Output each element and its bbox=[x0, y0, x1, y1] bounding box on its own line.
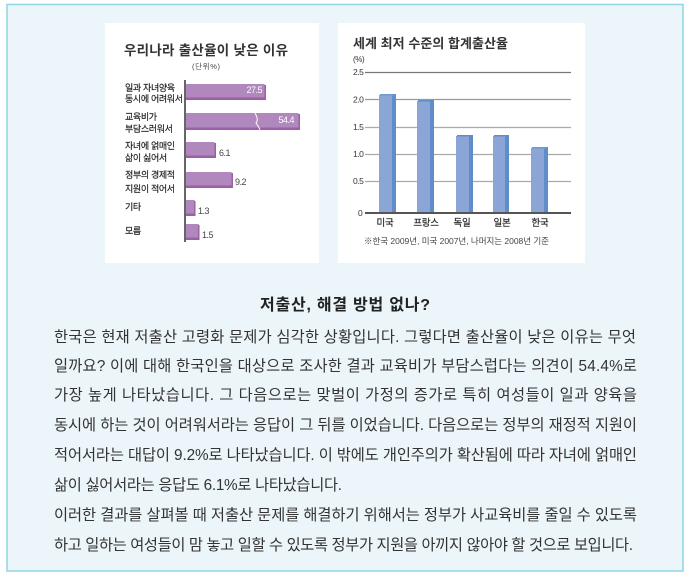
y axis labels: 1.5 bbox=[353, 122, 364, 132]
article body: 한국은 현재 저출산 고령화 문제가 심각한 상황입니다. 그렇다면 출산율이 낮은 이유는 무엇 bbox=[54, 329, 636, 346]
article title: 저출산, 해결 방법 없나? bbox=[260, 296, 430, 314]
article body: 이러한 결과를 살펴볼 때 저출산 문제를 해결하기 위해서는 정부가 사교육비를 줄일 수 있도록 bbox=[54, 507, 637, 524]
bar: 9.2 bbox=[125, 169, 247, 194]
bar: 27.5: 일과 자녀양육 bbox=[125, 83, 175, 93]
bar: 54.4: 54.4 bbox=[278, 115, 294, 125]
x axis labels: 일본 bbox=[494, 218, 511, 229]
bar: 54.4: 부담스러워서 bbox=[125, 123, 173, 134]
x axis labels bbox=[377, 217, 549, 229]
y axis labels: 2.0 bbox=[353, 94, 364, 104]
panel: reasons for low birth rate bbox=[105, 23, 319, 263]
bar: 프랑스 bbox=[417, 100, 434, 213]
gridlines bbox=[365, 72, 571, 182]
article body: 동시에 하는 것이 어려워서라는 응답이 그 뒤를 이었습니다. 다음으로는 정부의 재정적 지원이 bbox=[54, 417, 637, 434]
y axis labels: 0.5 bbox=[353, 176, 364, 186]
y axis labels: 0 bbox=[358, 208, 363, 218]
heading: fertility chart: 세계 최저 수준의 합계출산율 bbox=[353, 36, 508, 51]
x axis labels: 프랑스 bbox=[413, 217, 439, 229]
bar: 9.2: 9.2 bbox=[235, 177, 247, 187]
bar: 27.5: 27.5 bbox=[246, 85, 262, 95]
x axis labels: 한국 bbox=[532, 218, 549, 229]
article body: 일까요? 이에 대해 한국인을 대상으로 조사한 결과 교육비가 부담스럽다는 의견이 54.4%로 bbox=[54, 358, 637, 375]
article body: 적어서라는 대답이 9.2%로 나타났습니다. 이 밖에도 개인주의가 확산됨에 따라 자녀에 얽매인 bbox=[54, 447, 637, 464]
panel: world lowest fertility rates bbox=[338, 23, 585, 263]
bar: 1.3: 기타 bbox=[125, 202, 142, 212]
article body: 가장 높게 나타났습니다. 그 다음으로는 맞벌이 가정의 증가로 특히 여성들이 일과 양육을 bbox=[54, 387, 637, 404]
bar: 한국 bbox=[531, 147, 548, 213]
bar: 27.5: 동시에 어려워서 bbox=[125, 94, 183, 104]
bar: 6.1: 삶이 싫어서 bbox=[125, 153, 167, 163]
article body bbox=[54, 329, 637, 554]
baseline bbox=[365, 212, 571, 214]
bar: 미국 bbox=[379, 94, 396, 213]
y axis labels: 1.0 bbox=[353, 149, 364, 159]
bar: 54.4 bbox=[125, 112, 300, 134]
bar: 27.5 bbox=[125, 83, 266, 104]
bar: 독일 bbox=[456, 135, 473, 213]
bar: 6.1: 자녀에 얽매인 bbox=[125, 141, 175, 151]
x axis labels: 독일 bbox=[454, 218, 470, 229]
bar: 6.1 bbox=[125, 141, 231, 163]
unit label: (%) bbox=[353, 55, 365, 64]
heading: reasons chart: 우리나라 출산율이 낮은 이유 bbox=[124, 43, 288, 58]
bar: 9.2: 지원이 적어서 bbox=[125, 183, 175, 194]
y axis labels bbox=[353, 67, 364, 218]
bar: 6.1: 6.1 bbox=[219, 148, 231, 158]
bars bbox=[379, 94, 548, 213]
footnote: ※한국 2009년, 미국 2007년, 나머지는 2008년 기준 bbox=[364, 236, 549, 246]
unit label: (단위%) bbox=[192, 61, 220, 71]
axis bbox=[184, 80, 186, 242]
article body: 삶이 싫어서라는 응답도 6.1%로 나타났습니다. bbox=[54, 477, 342, 494]
bar: 1.5: 1.5 bbox=[202, 230, 214, 240]
bar: 1.3 bbox=[125, 200, 210, 216]
bar: 일본 bbox=[493, 135, 509, 213]
bar: 9.2: 정부의 경제적 bbox=[125, 169, 175, 180]
bar: 1.5 bbox=[125, 224, 214, 240]
x axis labels: 미국 bbox=[377, 218, 394, 229]
bar: 1.3: 1.3 bbox=[198, 206, 210, 216]
bar: 54.4: 교육비가 bbox=[125, 112, 157, 122]
bar: 1.5: 모름 bbox=[125, 226, 141, 236]
y axis labels: 2.5 bbox=[353, 67, 364, 77]
article body: 하고 일하는 여성들이 맘 놓고 일할 수 있도록 정부가 지원을 아끼지 않아야 할 것으로 보입니다. bbox=[54, 537, 633, 554]
